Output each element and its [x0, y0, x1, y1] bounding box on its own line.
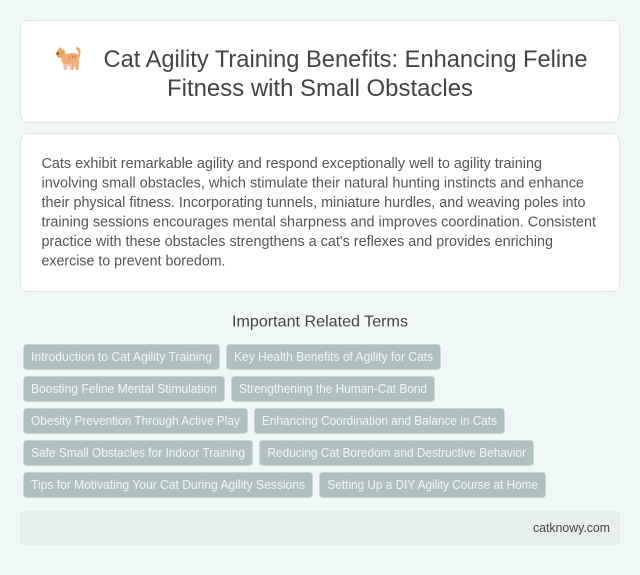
tag list	[24, 344, 546, 498]
paragraph text: practice with these obstacles strengthens a cat's reflexes and provides enriching	[42, 234, 553, 250]
paragraph text: involving small obstacles, which stimulate their natural hunting instincts and enhance	[42, 176, 584, 192]
title line 1: Cat Agility Training Benefits: Enhancing Feline	[104, 46, 588, 73]
paragraph text: exercise to prevent boredom.	[42, 254, 226, 270]
tag	[232, 376, 434, 402]
tag: Key Health Benefits of Agility for Cats	[234, 349, 433, 364]
tag: Enhancing Coordination and Balance in Cats	[262, 413, 497, 428]
tag	[24, 472, 312, 498]
tag: Boosting Feline Mental Stimulation	[31, 381, 217, 396]
title line 2: Fitness with Small Obstacles	[167, 75, 473, 102]
panel: description paragraph	[20, 134, 620, 292]
tag: Tips for Motivating Your Cat During Agility Sessions	[31, 477, 305, 492]
heading: important related terms: Important Related Terms	[232, 314, 408, 330]
tag	[260, 440, 534, 466]
tag	[24, 344, 220, 370]
tag: Obesity Prevention Through Active Play	[31, 413, 241, 428]
footer bar	[20, 511, 620, 545]
tag: Safe Small Obstacles for Indoor Training	[31, 445, 245, 460]
tag: Reducing Cat Boredom and Destructive Behavior	[268, 445, 527, 460]
icon: cat	[56, 47, 80, 70]
paragraph text	[42, 156, 596, 270]
tag	[24, 408, 248, 434]
paragraph text: training sessions encourages mental sharpness and improves coordination. Consistent	[42, 214, 596, 230]
tag: Introduction to Cat Agility Training	[31, 349, 212, 364]
tag: Strengthening the Human-Cat Bond	[239, 381, 427, 396]
tag	[320, 472, 546, 498]
paragraph text: their physical fitness. Incorporating tunnels, miniature hurdles, and weaving poles into	[42, 195, 586, 211]
tag	[226, 344, 440, 370]
footer site name: catknowy.com	[533, 520, 610, 535]
panel: title card	[20, 20, 620, 122]
tag: Setting Up a DIY Agility Course at Home	[328, 477, 538, 492]
tag	[24, 376, 224, 402]
tag	[24, 440, 252, 466]
tag	[254, 408, 504, 434]
paragraph text: Cats exhibit remarkable agility and respond exceptionally well to agility training	[42, 156, 542, 172]
